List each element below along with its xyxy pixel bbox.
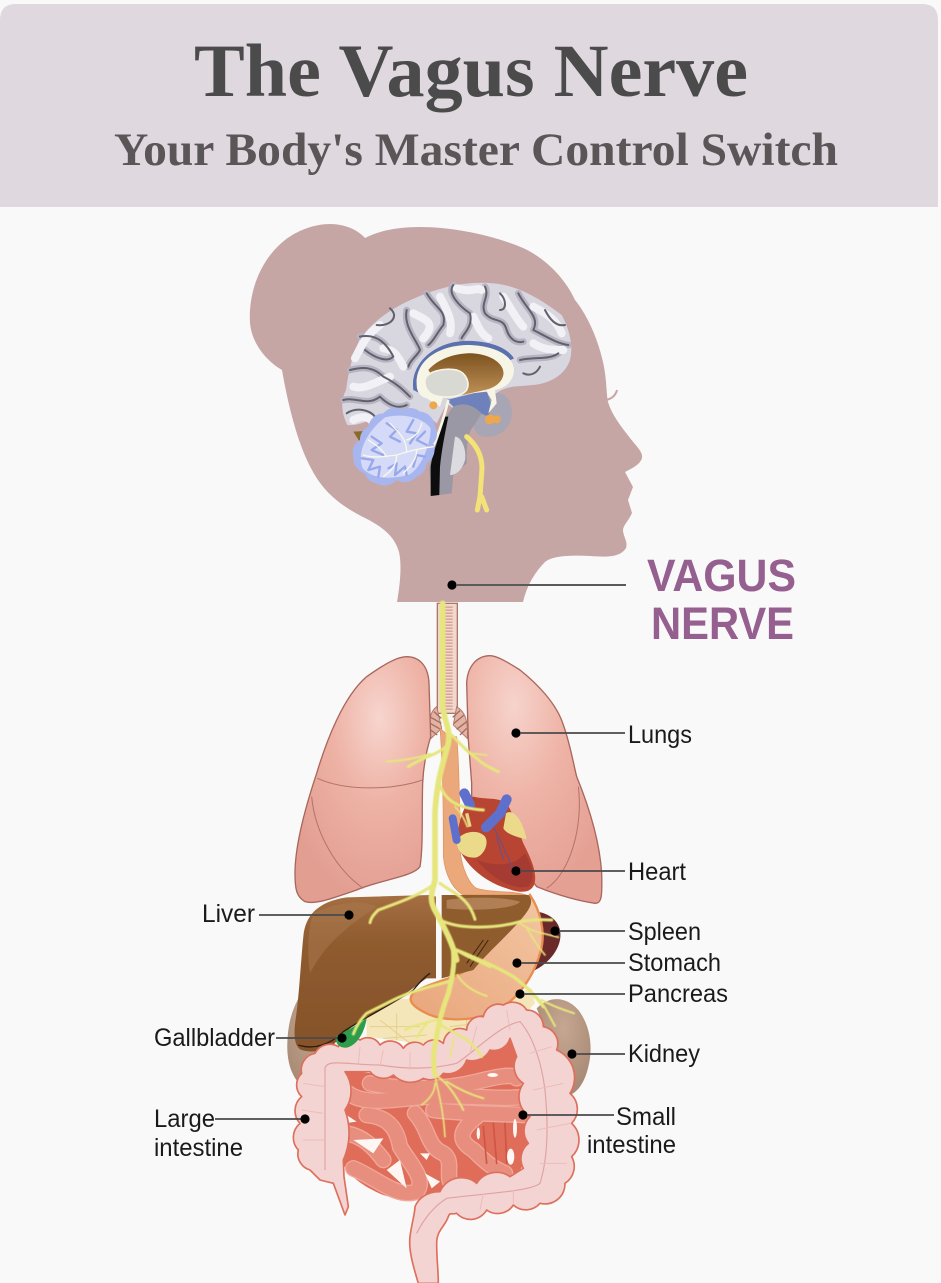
label: kidney bbox=[567, 1040, 700, 1068]
right kidney bbox=[537, 999, 591, 1095]
title: The Vagus Nerve bbox=[194, 30, 748, 113]
right lung fissure bbox=[547, 787, 579, 888]
vagus nerve trunk and branches bbox=[353, 603, 574, 1137]
brown ventricle bbox=[428, 353, 503, 398]
brain bbox=[342, 283, 571, 510]
left lung bbox=[295, 657, 431, 902]
liver bbox=[295, 895, 531, 1051]
label: pancreas: Pancreas bbox=[628, 980, 728, 1008]
pancreas bbox=[367, 988, 535, 1043]
small intestine loops bbox=[347, 1076, 525, 1193]
blue vessels bbox=[453, 793, 507, 840]
label: small intestine bbox=[518, 1103, 676, 1159]
label: large intestine: Large bbox=[154, 1105, 215, 1133]
label: gallbladder bbox=[154, 1024, 347, 1052]
left kidney bbox=[287, 983, 337, 1095]
label: vagus nerve: NERVE bbox=[651, 598, 794, 649]
label: liver: Liver bbox=[202, 900, 255, 928]
label: liver bbox=[202, 900, 354, 928]
label: lungs bbox=[511, 721, 692, 749]
left lung fissures bbox=[312, 778, 423, 888]
large intestine bbox=[293, 1002, 579, 1283]
cerebrum bbox=[342, 283, 571, 425]
abdominal organs bbox=[287, 895, 591, 1283]
bronchi bbox=[429, 707, 468, 740]
gyri folds bbox=[343, 285, 568, 417]
label: spleen bbox=[550, 918, 701, 946]
orange glands bbox=[429, 401, 501, 424]
pons and lower lobe bbox=[474, 393, 512, 437]
gyri highlights bbox=[353, 288, 563, 423]
spleen bbox=[527, 912, 561, 973]
label: heart: Heart bbox=[628, 858, 686, 886]
label: small intestine: Small bbox=[616, 1103, 676, 1131]
right lung bbox=[467, 656, 602, 903]
header banner bbox=[0, 4, 938, 207]
label: stomach bbox=[512, 949, 721, 977]
brain nerve bbox=[467, 437, 487, 510]
label: pancreas bbox=[515, 980, 728, 1008]
label: vagus nerve bbox=[447, 550, 796, 649]
trachea bbox=[437, 603, 457, 713]
stomach bbox=[411, 895, 543, 1019]
label: large intestine bbox=[154, 1105, 310, 1162]
colon inner line bbox=[325, 1022, 547, 1233]
gyri shading bbox=[343, 285, 568, 407]
brown wedge bbox=[353, 431, 373, 443]
black aqueduct band bbox=[431, 417, 448, 496]
white callosum bbox=[417, 345, 514, 413]
eyelash bbox=[606, 390, 617, 400]
label: vagus nerve: VAGUS bbox=[647, 550, 796, 601]
label: large intestine: intestine bbox=[154, 1134, 243, 1162]
blue corpus callosum arc bbox=[413, 341, 514, 400]
small intestine base bbox=[342, 1038, 530, 1199]
label: lungs: Lungs bbox=[628, 721, 692, 749]
blue third ventricle bbox=[447, 390, 492, 417]
label: heart bbox=[511, 858, 686, 886]
head silhouette bbox=[250, 224, 642, 602]
label: kidney: Kidney bbox=[628, 1040, 700, 1068]
label: stomach: Stomach bbox=[628, 949, 721, 977]
subtitle: Your Body's Master Control Switch bbox=[114, 124, 838, 176]
small intestine gaps bbox=[344, 1073, 517, 1188]
fat bbox=[457, 832, 487, 858]
cerebellum bbox=[353, 408, 437, 485]
thalamus bbox=[425, 369, 468, 397]
brainstem bbox=[429, 404, 482, 496]
esophagus / aorta bbox=[440, 728, 527, 895]
chest organs bbox=[295, 603, 602, 903]
label: spleen: Spleen bbox=[628, 918, 701, 946]
label: small intestine: intestine bbox=[587, 1131, 676, 1159]
gallbladder bbox=[336, 1018, 367, 1048]
label: gallbladder: Gallbladder bbox=[154, 1024, 275, 1052]
heart bbox=[453, 793, 535, 892]
